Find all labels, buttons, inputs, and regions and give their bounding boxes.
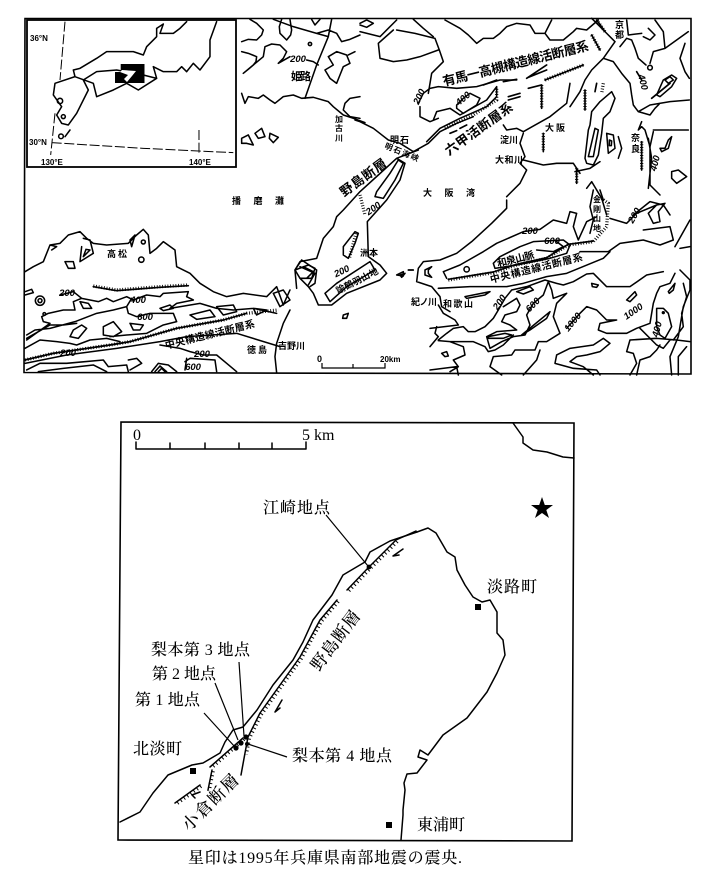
map frame [24,18,691,374]
elevation numbers: 200 [59,348,77,359]
inset location box [115,64,144,83]
detail map labels: 北淡町 [133,740,182,758]
topography Kii mountains, lower [430,270,690,375]
inset lat lon labels: 130°E [41,158,64,167]
place names [107,19,640,355]
Nojima fault [241,531,416,775]
detail map labels: 第 1 地点 [135,690,201,709]
detail map labels: 淡路町 [487,578,537,596]
place names: 川 [335,134,343,143]
inset lat lon labels: 140°E [189,158,212,167]
inset frame [27,20,236,167]
place names: 淀川 [500,134,518,145]
elevation numbers: 400 [648,154,663,173]
elevation numbers: 400 [453,89,474,109]
elevation numbers: 200 [193,349,211,360]
place names: 大 阪 湾 [423,187,475,198]
fault label: Nojima: 野島断層 [337,156,389,199]
detail map frame [118,422,574,841]
detail map labels [133,498,537,835]
place names: 洲本 [360,247,378,258]
fault label: Median Tectonic Line west: 中央構造線活断層系 [164,317,256,352]
detail map labels: 第 2 地点 [152,664,217,683]
place names: 京 [615,19,624,30]
strike-slip arrows [192,549,403,798]
mountains label: Yuzuruha: 諭鶴羽山地 [334,265,380,296]
place names: 奈 [631,132,640,143]
topography northwest [242,19,365,145]
topography southwest [25,229,348,373]
detail map labels: 江崎地点 [263,498,331,517]
elevation numbers [58,54,665,373]
place names: 高松 [107,248,127,259]
inset coastlines [51,22,233,155]
fault label: Median Tectonic Line east: 中央構造線活断層系 [489,250,584,286]
elevation numbers: 200 [289,54,307,65]
elevation numbers: 600 [544,236,561,247]
elevation numbers: 400 [129,295,147,306]
place names: 剛 [593,204,601,214]
mountains label: Izumi: 和泉山脈 [496,248,536,270]
elevation numbers: 400 [650,320,665,339]
fault label: Rokko: 六甲活断層系 [442,99,515,158]
place names: 金 [593,194,601,204]
top map scale bar: 20km [380,355,400,364]
place names: 山 [593,214,601,223]
place names: 吉野川 [278,340,305,351]
elevation numbers: 600 [137,312,154,323]
place names: 明石海峡 [383,141,420,163]
elevation numbers: 200 [521,226,539,237]
Nojima fault hachures [246,542,397,754]
detail map labels: 梨本第 4 地点 [292,746,393,765]
place names: 大和川 [495,154,523,165]
elevation numbers: 200 [411,87,428,107]
place names: 良 [631,143,640,154]
place names: 加 [335,114,343,124]
inset lat lon labels: 30°N [29,138,47,147]
Ogura fault [175,738,243,803]
scale bar 5 km [133,427,335,449]
place names: 古 [335,123,343,133]
leader lines [204,515,368,757]
elevation numbers: 400 [635,72,650,92]
detail map labels: 小倉断層 [178,770,243,835]
island inside location box [120,70,136,82]
elevation numbers: 200 [490,292,509,313]
detail map labels: 東浦町 [417,816,465,834]
caption: 星印は1995年兵庫県南部地震の震央. [188,848,462,867]
epicentre star [531,497,553,518]
place names: 播 磨 灘 [232,195,284,206]
panel: Nojima fault detail map [118,422,574,841]
topography northeast [570,18,689,215]
topography north central [355,19,598,197]
inset lat lon labels [29,34,212,167]
place names: 大阪 [545,122,565,133]
scale bar 5 km: 5 km [302,427,335,444]
topography and Median Tectonic Line, Shikoku [25,285,280,372]
town markers [190,604,481,828]
fault label: Arima-Takatsuki: 有馬一高槻構造線活断層系 [441,38,590,89]
top map scale bar: 0 [317,354,322,364]
elevation numbers: 200 [58,288,76,299]
place names: 明石 [390,135,409,145]
elevation numbers: 200 [363,199,384,219]
topography Kii and Izumi, upper [400,190,690,312]
panel: regional map of Osaka Bay area [24,18,691,375]
top map scale bar [317,354,400,368]
survey points [233,565,371,751]
place names: 紀ノ川 [411,296,437,307]
place names: 地 [593,223,601,233]
detail map labels: 梨本第 3 地点 [151,640,251,659]
place names: 和歌山 [443,298,473,309]
detail map labels: 野島断層 [307,607,364,674]
elevation numbers: 1000 [622,301,646,323]
coastline west [120,532,417,822]
elevation numbers: 600 [524,295,543,315]
elevation numbers: 200 [626,206,644,226]
elevation numbers: 200 [332,263,352,280]
Ogura fault hachures [176,739,244,804]
scale bar 5 km: 0 [133,427,141,444]
place names: 徳島 [247,344,267,355]
inset map of Japan [27,20,236,167]
Awaji island [295,150,418,305]
place names: 都 [615,29,624,40]
elevation numbers: 1000 [562,310,585,334]
place names: 姫路 [291,69,311,83]
coastline east and north [401,423,574,840]
map labels [58,19,665,373]
inset lat lon labels: 36°N [30,34,48,43]
elevation numbers: 600 [185,362,202,373]
